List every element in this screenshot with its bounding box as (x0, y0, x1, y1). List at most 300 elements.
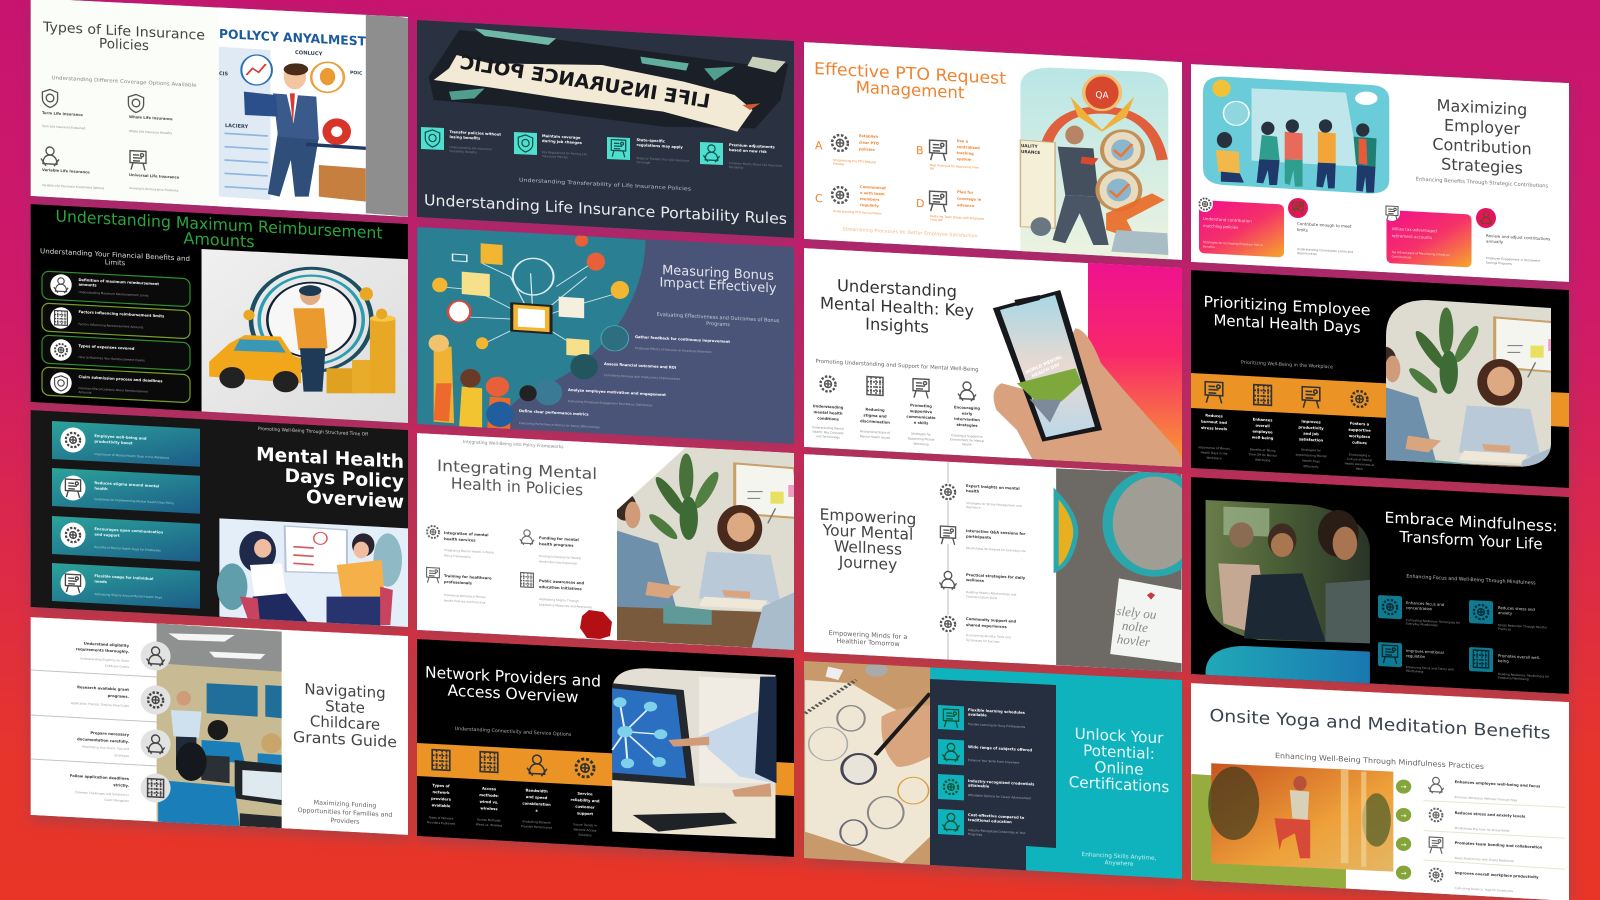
teal item cards: Importance of Mental Health Days in the Workplace (94, 452, 169, 460)
title: Understanding (837, 276, 957, 301)
gradient cards: Contributions (1392, 255, 1412, 260)
items: Funding Initiatives for Mental (539, 554, 581, 560)
photo: desk with note (1056, 468, 1202, 672)
columns of text: consideration (522, 801, 551, 807)
list items with icon discs: Research available grant (77, 685, 129, 692)
columns: Encouraging (954, 405, 980, 411)
columns: supportive (910, 409, 933, 414)
list items with icon discs: Prepare necessary (90, 731, 130, 737)
columns: Environment for Mental (950, 437, 984, 443)
title: Insights (865, 314, 929, 337)
items: Mindfulness Practices for Stress Relief (1455, 826, 1510, 833)
list of rounded items: Claim submission process and deadlines (78, 375, 163, 383)
list items: Employee Effects of Bonuses on Employee Retention (635, 346, 712, 354)
columns: Implementing Mental (1296, 453, 1327, 458)
columns: Strategies for (911, 431, 932, 437)
gradient cards: Utilize tax-advantaged (1392, 226, 1437, 233)
teal item cards: health (94, 487, 108, 491)
columns of text: s (535, 809, 538, 813)
arrows: → (1401, 812, 1407, 820)
title: Impact Effectively (659, 275, 777, 297)
list items with icon discs: Application Process: Step-by-Step Guide (71, 701, 129, 708)
illustration: policy analyst (219, 7, 408, 217)
teal item cards: needs (94, 580, 108, 584)
handwritten note: nolte (1121, 618, 1149, 635)
columns of text: Evaluating Network (522, 819, 551, 825)
title: Journey (838, 553, 897, 574)
panel: Effective PTO Request Management (804, 42, 1182, 260)
columns: productivity (1298, 425, 1324, 431)
columns: Encouraging a (1349, 452, 1370, 458)
columns: Effectively (1303, 464, 1319, 469)
columns of text: network (432, 790, 450, 795)
items: Term Life Insurance Explained (41, 124, 85, 130)
columns: stigma and (863, 413, 887, 419)
timeline and items: Communication Skills (966, 595, 998, 600)
item labels: Insurance Policies (542, 154, 568, 159)
items: Variable Life Insurance Investment Options (42, 183, 105, 190)
columns: Understanding (813, 404, 844, 410)
items: Funding for mental (539, 536, 579, 542)
title: Understanding Life Insurance Portability Rules (424, 191, 787, 228)
teal item cards: productivity boost (94, 440, 133, 446)
panel: Effective PTO Request Management: URANCE (1021, 149, 1040, 155)
columns: Health Days in the (1201, 450, 1228, 456)
timeline and items (939, 462, 1026, 660)
items: Cost-effective compared to (968, 813, 1025, 820)
items: Promotes overall well- (1498, 653, 1541, 660)
list items with icon discs: strictly. (113, 783, 130, 788)
timeline and items: shared experiences (966, 623, 1007, 629)
list items with icon discs: requirements thoroughly. (76, 647, 130, 654)
lettered items: tracking (957, 151, 974, 156)
columns: communicatio (906, 415, 936, 420)
items: Affordable Options for Career Advancement (968, 793, 1032, 800)
teal item cards: Employee well-being and (94, 434, 147, 441)
title: Contribution (1432, 134, 1532, 159)
photo: network on monitor (612, 668, 777, 838)
phone screen lettering: HEALTH DAY (1031, 361, 1062, 379)
illustration: car, gauge and coins (202, 249, 408, 423)
title: Understanding Maximum Reimbursement (56, 206, 382, 243)
subtitle: Empowering Minds for a (829, 629, 907, 641)
list items with icon discs: Maximizing Your Grant: Tips and (82, 745, 129, 751)
columns: Improves (1301, 419, 1321, 425)
columns: Importance of Mental (1199, 445, 1230, 451)
columns of text: Access (482, 787, 497, 791)
item labels: regulations may apply (636, 143, 683, 149)
title: Network Providers and (425, 663, 601, 691)
items: health services (444, 537, 476, 543)
illustration: hand with phone (993, 290, 1188, 473)
list items: Evaluating Employee Engagement Post-Bonus Distribution (568, 399, 653, 407)
title: Access Overview (448, 682, 579, 706)
columns: Workplace (1206, 456, 1222, 460)
items: Fingertips (968, 832, 983, 837)
title: Empowering (820, 505, 916, 529)
photo: meeting around a table (617, 447, 794, 650)
photo: call centre (157, 623, 282, 828)
red octagon accent (580, 610, 612, 639)
subtitle: Maximizing Funding (314, 799, 376, 810)
columns of text: Providers Explained (427, 820, 455, 826)
columns: satisfaction (1299, 437, 1324, 443)
lettered items: Understanding PTO Accrual Rates (833, 209, 882, 216)
gradient cards: limits (1297, 227, 1308, 233)
timeline and items: Resilience (966, 505, 981, 510)
list items with icon discs: Grant Navigation (104, 798, 129, 803)
list items with icon discs: Common Challenges and Solutions in (75, 790, 129, 797)
timeline and items: Techniques for Success (965, 638, 1000, 644)
columns: Supporting Mental (908, 436, 934, 442)
subtitle: Promoting Well-Being Through Structured Time Off (258, 426, 369, 438)
columns: Health Days (1302, 459, 1320, 463)
handwritten note: slely ou (1116, 603, 1158, 622)
columns: Health Awareness at (1345, 461, 1375, 467)
title: Amounts (183, 229, 255, 251)
columns of text: wireless (480, 806, 498, 811)
timeline and items: participants (966, 535, 992, 540)
teal item cards: Benefits of Mental Health Days for Employees (94, 545, 161, 553)
items: Mindfulness (1406, 669, 1424, 674)
list items: Correlating Bonuses with Productivity Improvements (604, 373, 681, 381)
lettered items: Communicat (860, 185, 886, 190)
list items: Assess financial outcomes and ROI (604, 362, 677, 370)
columns: Well-being (1255, 458, 1270, 462)
lettered items (815, 134, 984, 224)
subtitle: Promoting Understanding and Support for Mental Well-Being (815, 359, 979, 373)
columns of text: support (577, 811, 593, 816)
columns: Work (1356, 467, 1363, 471)
columns: and Terminology (816, 434, 840, 439)
items: regulation (1406, 653, 1426, 659)
items: Everyday Mindfulness (1406, 622, 1438, 627)
arrows: → (1401, 870, 1407, 878)
lettered items: e with team (860, 191, 885, 196)
panel: Mental Health Days Policy Overview (31, 410, 408, 628)
lettered items: advance (957, 203, 975, 208)
panel: Effective PTO Request Management: UALITY (1021, 143, 1039, 149)
lettered items: Best Practices for Approving Time (930, 163, 979, 170)
columns: stress levels (1201, 426, 1228, 431)
arrows: → (1401, 841, 1407, 849)
lettered items: Process (833, 162, 844, 166)
illustration: teal network of icons and people (417, 225, 645, 433)
panel: Integrating Mental Health in Policies (417, 430, 804, 657)
title: Days Policy (285, 466, 404, 493)
items: Boost Productivity with Onsite Meditation (1455, 856, 1515, 863)
columns: conditions (817, 416, 840, 422)
timeline and items: wellness (966, 578, 985, 583)
title: Navigating (304, 680, 386, 702)
columns: Promoting (910, 403, 932, 409)
top caption: Integrating Well-Being into Policy Frameworks (463, 439, 564, 450)
items: being (1498, 658, 1509, 664)
gradient cards: Understand contribution (1203, 216, 1252, 224)
gradient cards: matching policies (1203, 223, 1238, 230)
items: concentration (1406, 605, 1433, 611)
columns: workplace (1349, 434, 1371, 439)
items: Promoting Workplace Mental (444, 593, 486, 599)
panel: Understanding Mental Health Key Insights (804, 248, 1188, 473)
lettered items: members (860, 197, 880, 202)
teal item cards: Reduces stigma around mental (94, 481, 159, 488)
panel: Unlock Your Potential Online Certifications (804, 660, 1182, 879)
columns of text: Future Trends in (573, 822, 597, 828)
handwritten note: hovler (1116, 631, 1152, 650)
teal item cards: Guidelines for Implementing Mental Health Days Policy (94, 497, 174, 505)
list items with icon discs: documentation carefully. (77, 737, 130, 744)
items: Wide range of subjects offered (968, 745, 1032, 752)
panel: Understanding Life Insurance Portability Rules (417, 20, 794, 238)
panel: Maximizing Employer Contribution Strategies (1191, 64, 1569, 282)
list of rounded items: Types of expenses covered (78, 344, 135, 351)
illustration headline: POLLYCY ANYALMEST (219, 26, 366, 49)
panel: Onsite Yoga and Meditation Benefits (1191, 683, 1569, 900)
list of rounded items: Understanding Maximum Reimbursement Limits (78, 290, 149, 298)
columns: Creating a Supportive (951, 433, 983, 439)
panel: Network Providers and Access Overview (417, 639, 794, 857)
icon tiles (421, 127, 723, 165)
gradient cards: annually (1486, 239, 1504, 244)
items: Public awareness and (539, 579, 585, 585)
subtitle: Understanding Different Coverage Options Available (52, 75, 196, 89)
lettered items: Streamlining the PTO Request (833, 158, 877, 164)
title: Embrace Mindfulness: (1384, 508, 1558, 536)
item labels: State-specific (636, 138, 665, 143)
subtitle: Enhancing Well-Being Through Mindfulness Practices (1275, 751, 1484, 771)
items: Health Services Expansion (539, 560, 578, 566)
orange band (1191, 373, 1569, 427)
subtitle: Healthier Tomorrow (836, 637, 900, 648)
badge and certificate lettering: QA (1095, 91, 1109, 101)
subtitle: Anywhere (1105, 860, 1134, 868)
list of rounded items: Amounts (78, 390, 92, 395)
panel: Types of Life Insurance Policies: POIC (350, 70, 363, 77)
columns: Well-being (913, 442, 929, 446)
lettered items: policies (859, 147, 876, 152)
panel: Types of Life Insurance Policies: LACIERY (225, 123, 249, 130)
title: Transform Your Life (1398, 528, 1543, 553)
item labels: Transfer policies without (450, 130, 501, 137)
items: Cultivating Balance: Yoga for Employees (1455, 886, 1513, 893)
items: Enhance Your Skills From Anywhere (968, 758, 1019, 765)
panel: Embrace Mindfulness Transform Your Life (1191, 477, 1569, 694)
subtitle: Evaluating Effectiveness and Outcomes of Bonus (657, 312, 780, 324)
items: Integration of mental (444, 531, 489, 537)
gradient cards: Understanding Contribution Limits and (1297, 247, 1353, 254)
title: Health in Policies (451, 475, 583, 499)
arrows (1401, 783, 1407, 878)
item labels: Maintain coverage (542, 134, 581, 140)
title: Maximizing (1437, 96, 1527, 119)
timeline and items: health (966, 489, 980, 494)
columns: Culture of Mental (1347, 457, 1372, 462)
list items: Evaluating Performance Metrics for Bonus Effectiveness (519, 421, 600, 429)
item labels: Premium adjustments (729, 143, 776, 149)
items: Addressing Stigma Through (539, 597, 579, 603)
gradient cards: Tax Advantages of Maximizing Employer (1391, 250, 1451, 257)
items: Whole Life Insurance Benefits (129, 129, 172, 135)
subtitle: Providers (330, 817, 360, 826)
green block and yoga photo (1191, 763, 1565, 891)
columns: Reducing (865, 407, 885, 413)
columns of text: methods: (479, 793, 499, 798)
columns: Enhances (1253, 417, 1273, 423)
title: Measuring Bonus (662, 263, 774, 284)
columns: Fosters a (1350, 422, 1370, 427)
title: Online (1094, 758, 1144, 779)
timeline and items: Community support and (966, 617, 1016, 624)
columns: Health (962, 442, 972, 447)
item labels: Portability Benefits (450, 149, 477, 154)
columns: intervention (954, 417, 980, 422)
timeline and items: Mindfulness Techniques for Everyday Life (966, 546, 1026, 553)
items: attainable (968, 784, 990, 789)
lettered items: D (916, 197, 924, 210)
items: Whole Life Insurance (129, 115, 173, 121)
title: Strategies (1441, 154, 1523, 178)
gradient tab (1206, 646, 1370, 687)
items: Cultivating Resilience: Techniques for (1406, 618, 1461, 625)
title: Employer (1444, 116, 1520, 139)
columns: overall (1255, 424, 1270, 428)
title: Effective PTO Request (814, 59, 1007, 88)
columns: Benefits of Taking (1250, 447, 1276, 453)
items: Building Resilience: Mindfulness for (1498, 672, 1550, 679)
title: Policies (99, 36, 149, 54)
timeline and items: Building Healthy Relationships and (966, 590, 1017, 597)
list items with icon discs: Strategies (114, 753, 129, 758)
illustration: two people at a board (217, 518, 408, 628)
title: Integrating Mental (437, 457, 597, 483)
items: Industry-recognized credentials (968, 779, 1035, 787)
subtitle: Understanding Your Financial Benefits and (40, 247, 190, 263)
lettered items: A (815, 139, 823, 152)
item labels: based on new risk (729, 148, 767, 154)
list items with icon discs: programs. (108, 694, 130, 699)
items (41, 89, 180, 193)
columns: burnout and (1201, 420, 1227, 425)
columns of text: Service (577, 792, 593, 796)
photo: meditating women (1206, 500, 1370, 643)
columns: Reduces (1205, 414, 1224, 418)
mirrored ribbon lettering: LIFE INSURANCE POLIC (458, 52, 712, 113)
items: Emotional Well-being (1498, 676, 1529, 681)
subtitle: Limits (105, 258, 126, 267)
illustration: team on teal card (1203, 77, 1389, 193)
columns of text: and speed (526, 795, 548, 800)
subtitle: Enhancing Benefits Through Strategic Contributions (1416, 177, 1549, 189)
items: Variable Life Insurance (42, 168, 90, 175)
columns: well-being (1252, 435, 1274, 441)
list items: Analyze employee motivation and engagement (568, 388, 666, 397)
title: Mental Health: Key (820, 293, 974, 321)
subtitle: Enhancing Skills Anytime, (1082, 852, 1157, 862)
subtitle: Programs (706, 321, 730, 328)
columns: Recognizing Signs of (860, 429, 891, 435)
illustration: QA walking man (1020, 68, 1168, 260)
title: Onsite Yoga and Meditation Benefits (1210, 706, 1551, 744)
item labels: losing benefits (450, 135, 481, 141)
list items with icon discs: Childcare Grants (105, 664, 129, 669)
columns of text: Access Methods: (477, 817, 501, 823)
items (427, 526, 592, 609)
item labels: Understanding Life Insurance (450, 145, 492, 151)
panel: Measuring Bonus Impact Effectively (417, 225, 794, 444)
columns of text (427, 783, 600, 838)
columns of text: Network Access (574, 827, 597, 833)
panel: Empowering Your Mental Wellness Journey (804, 454, 1202, 672)
items: Stress Reduction Through Mindful (1498, 623, 1547, 630)
columns of text: customer (575, 805, 595, 810)
lettered items: B (916, 144, 924, 157)
items: Reduces stress and (1498, 605, 1535, 612)
item labels: Common Myths About Life Insurance (729, 161, 782, 168)
lettered items: Off (930, 167, 935, 171)
columns: Strategies for (1301, 447, 1322, 453)
gradient block (1088, 262, 1182, 467)
items: Training for healthcare (444, 574, 492, 581)
title: Wellness (834, 537, 902, 559)
lettered items: regularly (860, 203, 879, 208)
panel: Navigating State Childcare Grants Guide (31, 617, 408, 835)
items: Enhances focus and (1406, 600, 1445, 607)
subtitle: Prioritizing Well-Being in the Workplace (1241, 360, 1333, 370)
columns: supportive (1348, 428, 1371, 433)
subtitle: Understanding Transferability of Life Insurance Policies (519, 177, 691, 193)
illustration: life insurance ribbon (429, 28, 788, 132)
gradient cards: Review and adjust contributions (1486, 233, 1550, 241)
items: Enhance Workplace Wellness Through Yoga (1455, 795, 1517, 802)
lettered items: coverage in (957, 197, 982, 202)
title: Certifications (1069, 773, 1169, 796)
panel: Types of Life Insurance Policies: CIS (219, 71, 229, 77)
gradient cards: Opportunities (1297, 251, 1317, 256)
columns of text: providers (431, 797, 452, 802)
list of rounded items: How to Maximize Your Reimbursement Claims (78, 355, 145, 363)
columns of text: Types of (432, 784, 450, 788)
panel: Prioritizing Employee Mental Health Days (1191, 270, 1569, 511)
items: Universal Life Insurance Flexibility (129, 186, 179, 193)
items: Health Policies and Practices (444, 599, 486, 605)
lettered items: centralized (957, 145, 980, 150)
list of rounded items: amounts (78, 283, 97, 288)
arrows: → (1401, 783, 1407, 791)
item labels (450, 130, 782, 172)
list of rounded items: Factors Influencing Reimbursement Amounts (78, 322, 144, 329)
items: Improves overall workplace productivity (1455, 871, 1539, 879)
item labels: during job changes (542, 139, 583, 145)
title: Overview (306, 487, 404, 513)
columns of text: Wired vs. Wireless (476, 822, 503, 828)
items: Enhances employee well-being and focus (1455, 780, 1541, 789)
lettered items: Use a (957, 139, 969, 144)
footer subtitle: Streamlining Processes for Better Employee Satisfaction (842, 226, 978, 240)
columns: Health: Key Concepts (813, 430, 844, 435)
items: education initiatives (539, 585, 582, 591)
gradient cards: Savings Programs (1486, 261, 1512, 266)
columns of text: Provider Performance (521, 824, 552, 830)
item labels: Key Regulations for Porting Life (542, 150, 587, 156)
item labels: Coverage (636, 160, 651, 165)
columns of text: Solutions (578, 833, 592, 837)
orange band (417, 743, 794, 796)
columns: early (962, 412, 973, 416)
items: Legislative Measures and Awareness (539, 603, 592, 609)
band icons (432, 750, 594, 777)
lettered items: Time Off (929, 218, 943, 222)
